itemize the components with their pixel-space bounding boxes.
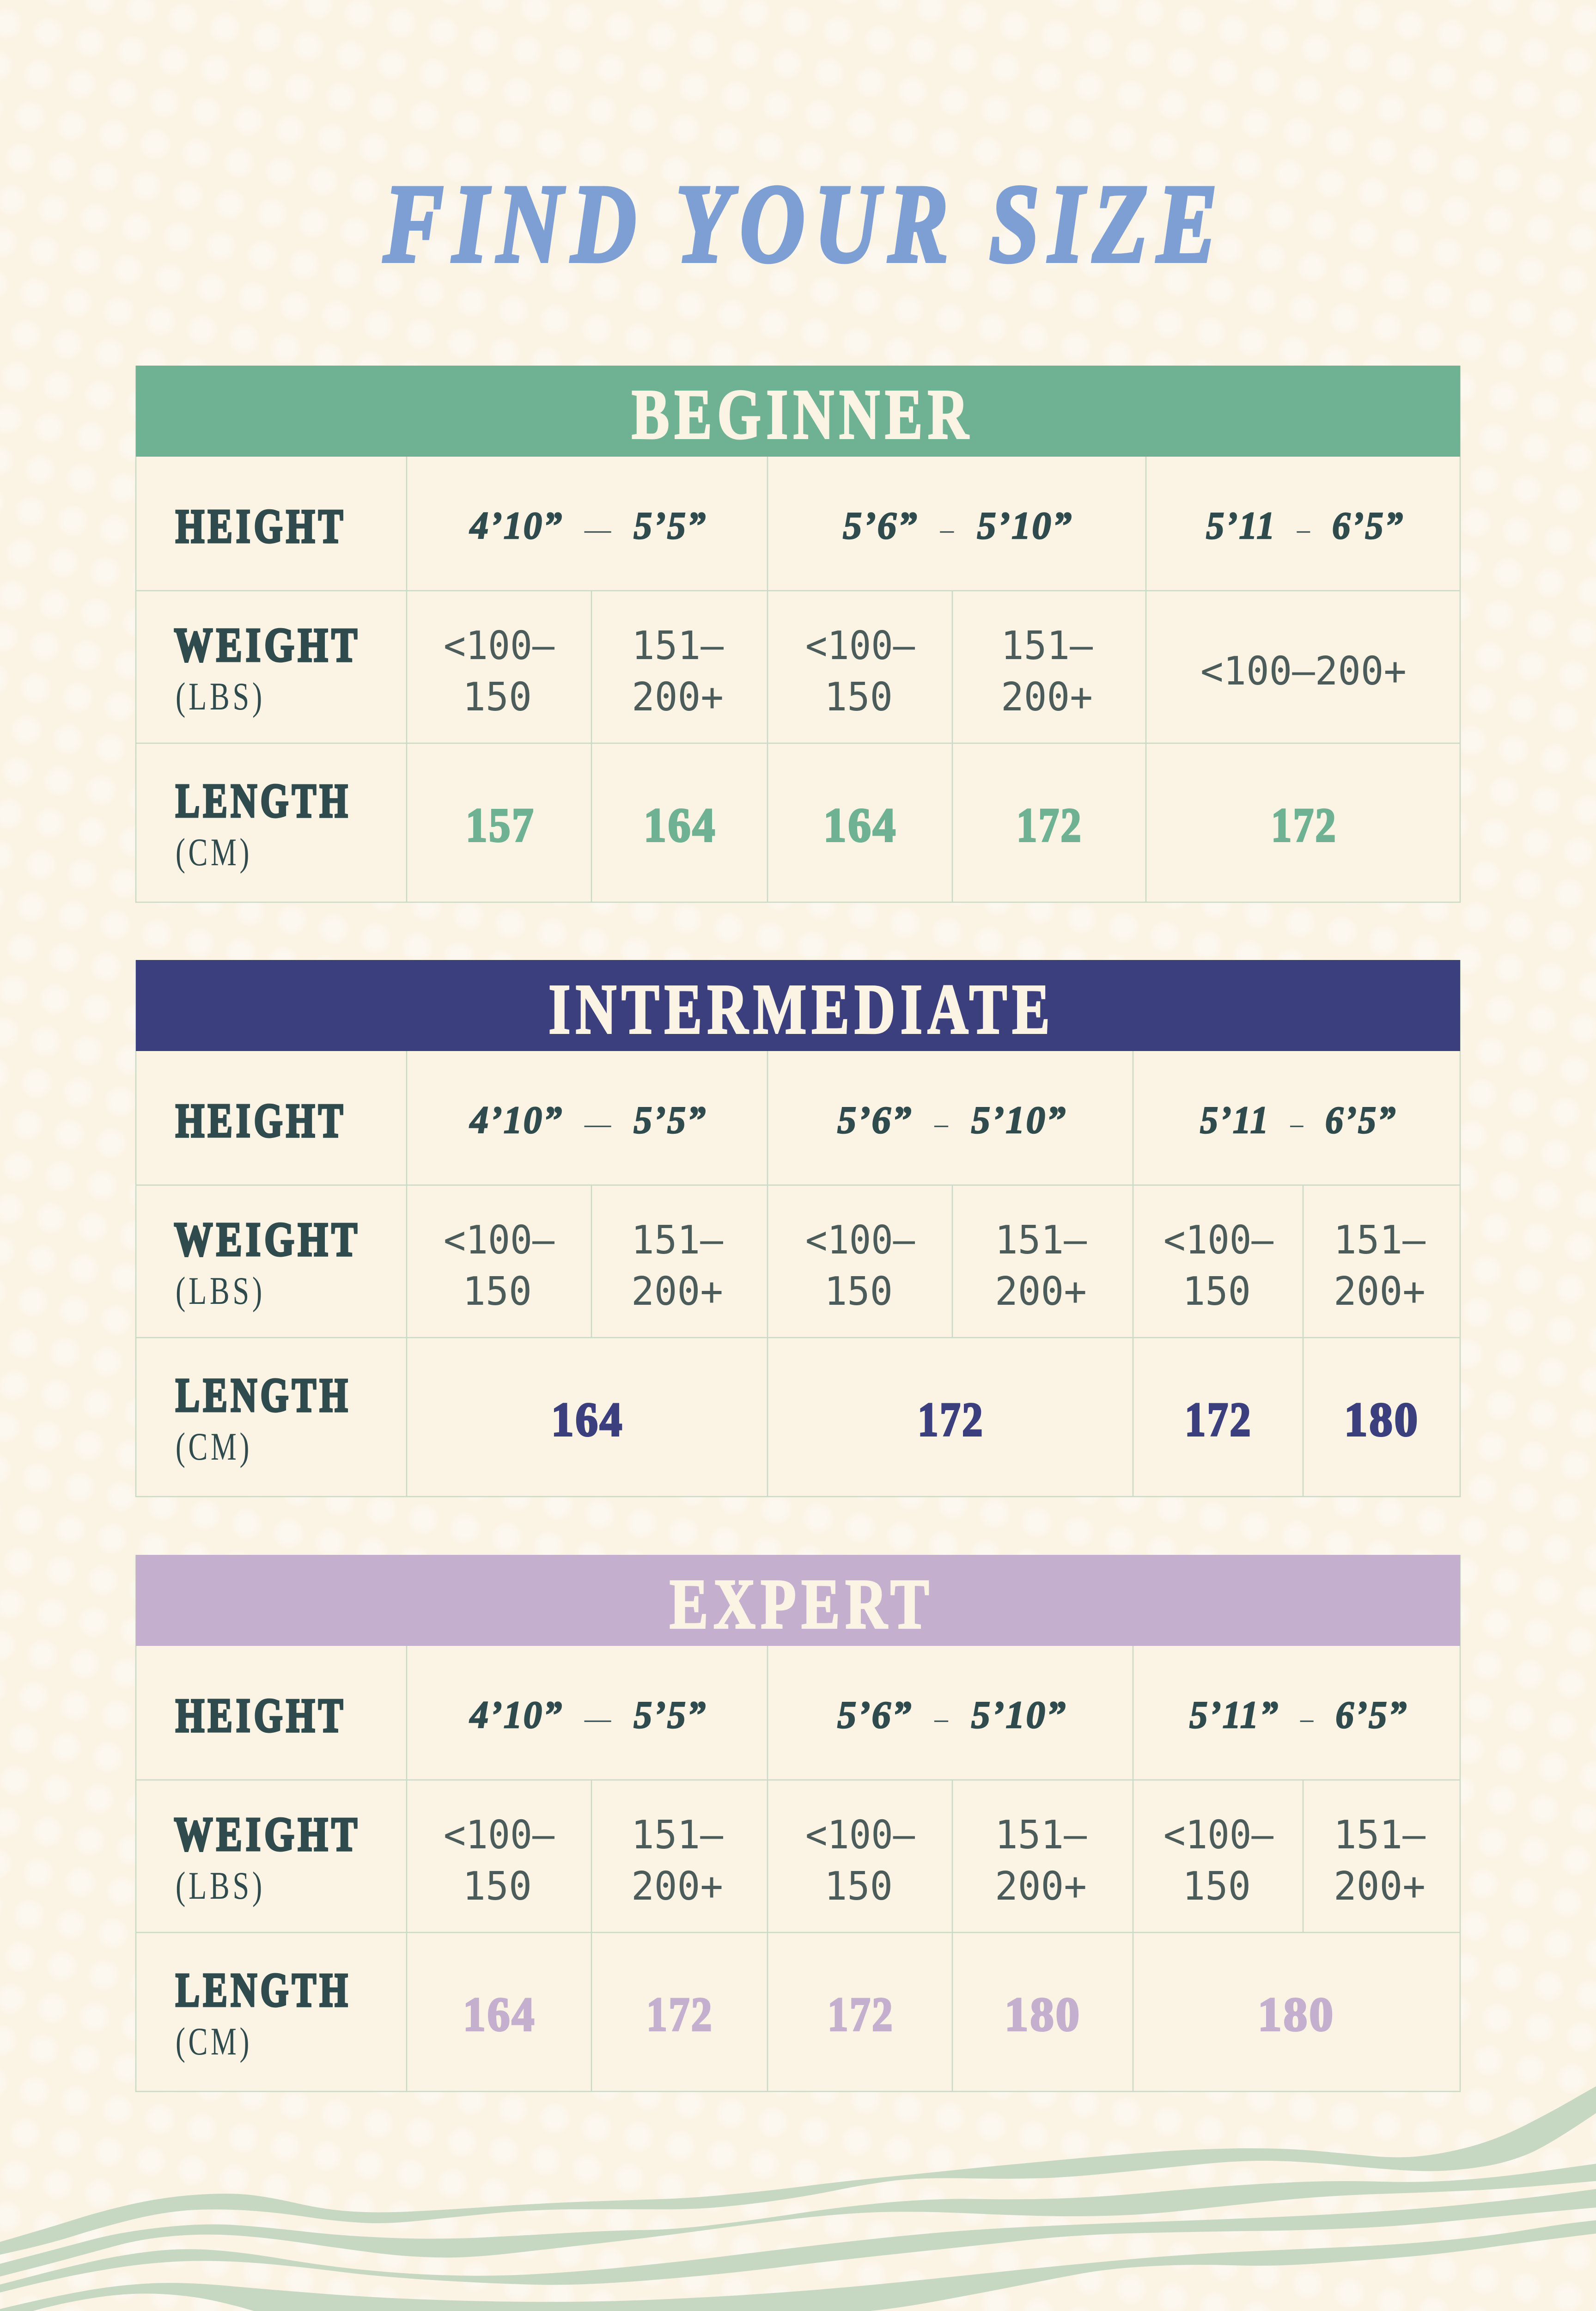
weight cell 4: 151– xyxy=(995,1217,1087,1263)
row label: length: (CM) xyxy=(176,2020,252,2063)
height range 3: 5’11” – 6’5” xyxy=(1189,1694,1408,1736)
row label: weight: (LBS) xyxy=(176,1269,265,1313)
weight cell 4 xyxy=(995,1217,1087,1314)
wave band 3 xyxy=(0,2184,1596,2302)
weight cell 5 xyxy=(1163,1217,1274,1314)
row label: weight: WEIGHT xyxy=(174,1808,361,1861)
weight cell 3 xyxy=(805,1217,915,1314)
panel: beginner size table xyxy=(136,366,1460,902)
weight cell 2: 151– xyxy=(632,623,724,669)
weight cell 3: <100– xyxy=(805,623,915,669)
weight cell 4 xyxy=(995,1812,1087,1909)
length value 164: 164 xyxy=(551,1393,624,1446)
height range 3: 5’11 – 6’5” xyxy=(1206,504,1404,547)
length value 164: 164 xyxy=(644,799,717,852)
weight cell 2: 200+ xyxy=(631,1269,723,1314)
weight cell 1: <100– xyxy=(444,623,555,669)
row label: weight: (LBS) xyxy=(176,1864,265,1907)
row label: length xyxy=(176,1369,351,1468)
weight cell 3: <100– xyxy=(805,1217,915,1263)
weight cell 2: 200+ xyxy=(632,674,724,720)
row label: weight: (LBS) xyxy=(176,675,265,718)
heading: intermediate: INTERMEDIATE xyxy=(548,970,1055,1049)
header band: intermediate xyxy=(136,960,1460,1051)
length value 172: 172 xyxy=(1185,1393,1252,1446)
length value 164: 164 xyxy=(823,799,897,852)
weight cell 5: <100–200+ xyxy=(1200,648,1407,694)
title: FIND YOUR SIZE xyxy=(383,162,1226,286)
row label: length: LENGTH xyxy=(176,774,351,827)
weight cell 1: <100– xyxy=(444,1812,555,1858)
header band: expert xyxy=(136,1555,1460,1646)
weight cell 2: 151– xyxy=(631,1217,724,1263)
row label: weight xyxy=(174,1213,361,1313)
row label: weight xyxy=(174,1808,361,1907)
table body and grid: expert xyxy=(136,1555,1460,2091)
weight cell 2: 151– xyxy=(631,1812,724,1858)
weight cell 1: 150 xyxy=(463,1864,532,1909)
wave band 2 xyxy=(0,2159,1596,2287)
row label: weight: WEIGHT xyxy=(174,1213,361,1266)
weight cell 2 xyxy=(631,1812,724,1909)
weight cell 3: 150 xyxy=(824,1269,893,1314)
weight cell 5: <100– xyxy=(1163,1217,1274,1263)
panel: intermediate size table xyxy=(136,960,1460,1497)
weight cell 3: <100– xyxy=(805,1812,915,1858)
table body and grid: intermediate xyxy=(136,960,1460,1497)
height range 2: 5’6” – 5’10” xyxy=(843,504,1073,547)
height range 2: 5’6” – 5’10” xyxy=(837,1694,1067,1736)
weight cell 6 xyxy=(1334,1812,1426,1909)
weight cell 6 xyxy=(1334,1217,1426,1314)
weight cell 1: 150 xyxy=(463,674,532,720)
weight cell 1: <100– xyxy=(444,1217,555,1263)
weight cell 4: 200+ xyxy=(1001,674,1093,720)
weight cell 3 xyxy=(805,623,915,720)
heading: expert: EXPERT xyxy=(670,1565,934,1644)
row label: length: LENGTH xyxy=(176,1369,351,1422)
table body and grid: beginner xyxy=(136,366,1460,902)
weight cell 5: <100– xyxy=(1163,1812,1274,1858)
weight cell 2 xyxy=(631,1217,724,1314)
row label: weight xyxy=(174,618,361,718)
row label: length: (CM) xyxy=(176,1425,252,1468)
weight cell 6: 200+ xyxy=(1334,1864,1425,1909)
weight cell 3: 150 xyxy=(824,674,893,720)
panel: expert size table xyxy=(136,1555,1460,2091)
weight cell 2 xyxy=(632,623,724,720)
weight cell 6: 200+ xyxy=(1334,1269,1425,1314)
weight cell 4: 200+ xyxy=(995,1269,1087,1314)
height range 3: 5’11 – 6’5” xyxy=(1200,1099,1397,1142)
weight cell 4: 151– xyxy=(995,1812,1087,1858)
weight cell 6: 151– xyxy=(1334,1812,1426,1858)
weight cell 1 xyxy=(444,1217,555,1314)
weight cell 2: 200+ xyxy=(631,1864,723,1909)
length value 180: 180 xyxy=(1344,1393,1419,1446)
weight cell 3: 150 xyxy=(824,1864,893,1909)
length value 180: 180 xyxy=(1005,1988,1081,2041)
header band: beginner xyxy=(136,366,1460,457)
row label: length xyxy=(176,774,351,874)
weight cell 3 xyxy=(805,1812,915,1909)
weight cell 4: 151– xyxy=(1001,623,1093,669)
length value 180: 180 xyxy=(1258,1988,1335,2041)
height range 1: 4’10” — 5’5” xyxy=(469,504,707,547)
length value 172: 172 xyxy=(828,1988,894,2041)
row label: length: (CM) xyxy=(176,831,252,874)
wave band 4 xyxy=(0,2217,1596,2311)
row label: weight: WEIGHT xyxy=(174,618,361,672)
length value 172: 172 xyxy=(646,1988,713,2041)
length value 172: 172 xyxy=(918,1393,984,1446)
length value 164: 164 xyxy=(463,1988,536,2041)
weight cell 1: 150 xyxy=(463,1269,532,1314)
row label: length: LENGTH xyxy=(176,1963,351,2017)
length value 172: 172 xyxy=(1017,799,1083,852)
weight cell 1 xyxy=(444,1812,555,1909)
height range 2: 5’6” – 5’10” xyxy=(837,1099,1067,1142)
length value 157: 157 xyxy=(466,799,535,852)
decorative green wavy bands xyxy=(0,2068,1596,2311)
weight cell 4: 200+ xyxy=(995,1864,1087,1909)
weight cell 5: 150 xyxy=(1182,1864,1251,1909)
height range 1: 4’10” — 5’5” xyxy=(469,1694,707,1736)
heading: beginner: BEGINNER xyxy=(632,375,974,454)
wave band 1 xyxy=(0,2068,1596,2264)
length value 172: 172 xyxy=(1271,799,1337,852)
row label: height: HEIGHT xyxy=(176,1094,347,1147)
weight cell 5: 150 xyxy=(1182,1269,1251,1314)
weight cell 4 xyxy=(1001,623,1093,720)
row label: height: HEIGHT xyxy=(176,500,347,553)
row label: height: HEIGHT xyxy=(176,1689,347,1742)
weight cell 6: 151– xyxy=(1334,1217,1426,1263)
row label: length xyxy=(176,1963,351,2063)
weight cell 5 xyxy=(1163,1812,1274,1909)
height range 1: 4’10” — 5’5” xyxy=(469,1099,707,1142)
weight cell 1 xyxy=(444,623,555,720)
